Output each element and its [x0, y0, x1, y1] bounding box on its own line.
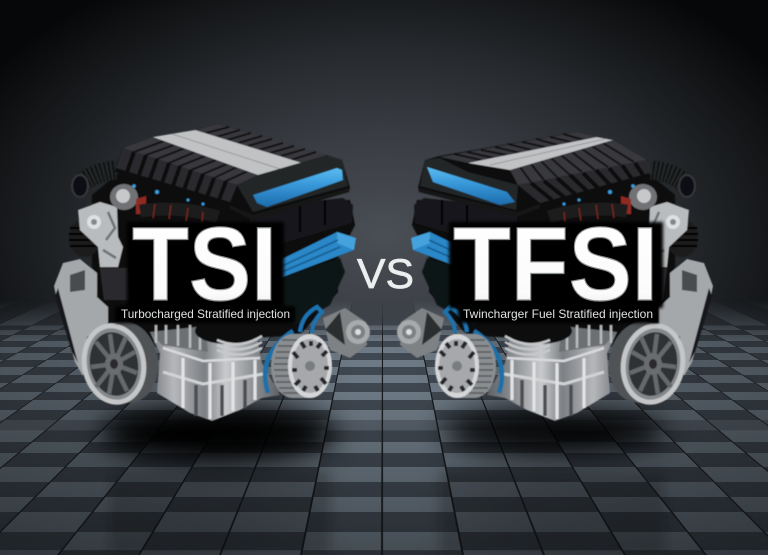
TSI title block — [115, 206, 295, 323]
right engine cover — [418, 132, 653, 217]
VS label: VS — [357, 250, 414, 297]
right engine: TFSI — [397, 132, 713, 421]
TFSI title block — [449, 206, 663, 323]
shadows on the floor — [100, 406, 667, 555]
tiled perspective floor — [0, 305, 768, 555]
TFSI heading: TFSI — [453, 206, 658, 323]
left engine: TSI — [54, 124, 370, 421]
TFSI subtitle: Twincharger Fuel Stratified injection — [463, 307, 653, 321]
left engine cover — [115, 124, 350, 220]
TSI heading: TSI — [132, 206, 277, 323]
TSI subtitle: Turbocharged Stratified injection — [121, 307, 290, 321]
